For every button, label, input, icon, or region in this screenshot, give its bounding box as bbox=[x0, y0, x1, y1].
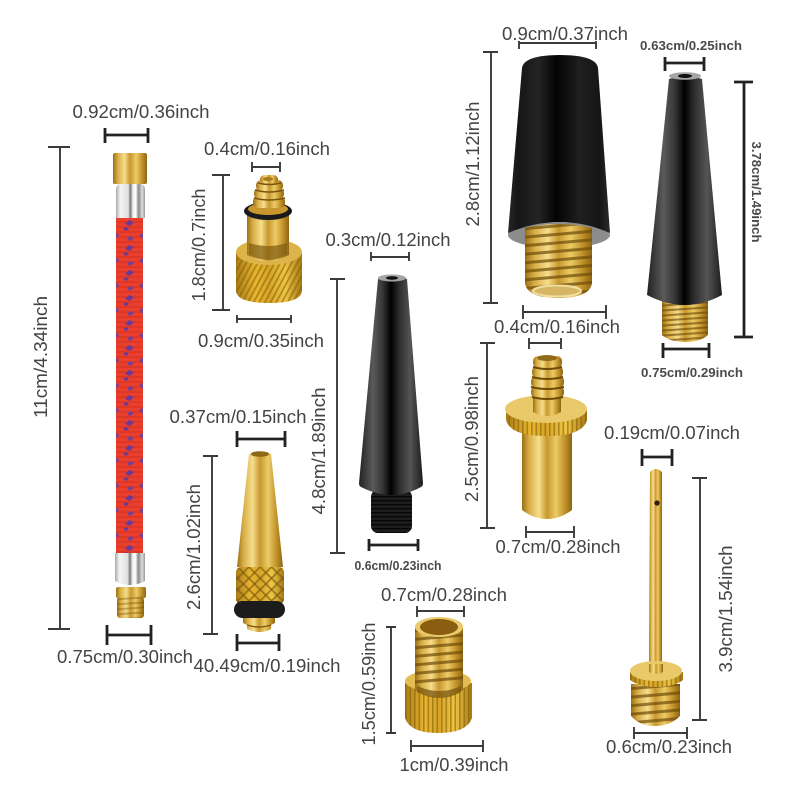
dimension: adapter height bbox=[189, 175, 230, 310]
dimension: slim cone thread width: 0.75cm/0.29inch bbox=[641, 365, 743, 380]
dimension: taper top width: 0.37cm/0.15inch bbox=[170, 407, 306, 427]
dimension: nut height: 1.5cm/0.59inch bbox=[359, 622, 379, 746]
wide cone body bbox=[508, 55, 610, 233]
dimension: wide cone height bbox=[463, 52, 498, 303]
dimension: taper bottom width bbox=[194, 634, 340, 676]
dimension: nut base width bbox=[400, 740, 508, 775]
dimension: wide cone thread width bbox=[494, 305, 620, 337]
dimension: adapter base width: 0.9cm/0.35inch bbox=[198, 331, 324, 351]
slim cone brass thread bbox=[662, 298, 708, 342]
valve flange bbox=[505, 395, 587, 436]
dimension: long cone top width: 0.3cm/0.12inch bbox=[326, 230, 450, 250]
dimension: needle width bbox=[604, 423, 740, 466]
dimension: nut top width bbox=[381, 585, 507, 617]
dimension: adapter height: 1.8cm/0.7inch bbox=[189, 188, 209, 302]
dimension: slim cone thread width bbox=[641, 343, 743, 380]
hose lower chrome ferrule bbox=[115, 553, 145, 585]
dimension: adapter base width bbox=[198, 315, 324, 351]
dimension: long cone height bbox=[309, 279, 345, 553]
brass taper lower tip bbox=[243, 612, 275, 632]
long cone body bbox=[359, 277, 423, 495]
brass taper knurled collar bbox=[236, 567, 284, 604]
valve cylinder bbox=[522, 432, 572, 519]
dimension: adapter tip width bbox=[204, 139, 330, 172]
component: knurled brass adapter bbox=[189, 139, 330, 351]
component: slim black cone bbox=[640, 38, 764, 380]
component: brass nut adapter bbox=[359, 585, 508, 775]
hose brass end thread bbox=[116, 587, 146, 618]
hose top brass cap bbox=[113, 153, 147, 184]
dimension: slim cone top width bbox=[640, 38, 742, 71]
dimension: taper top width bbox=[170, 407, 306, 447]
dimension: taper height bbox=[184, 456, 218, 634]
hose upper chrome ferrule bbox=[116, 184, 145, 218]
dimension: valve tip width bbox=[529, 338, 561, 349]
dimension: long cone top width bbox=[326, 230, 450, 261]
wide cone brass thread bbox=[525, 224, 592, 298]
dimension: taper height: 2.6cm/1.02inch bbox=[184, 484, 204, 610]
needle threaded base bbox=[630, 661, 683, 726]
needle shaft bbox=[649, 469, 662, 668]
dimension: hose end width bbox=[57, 625, 193, 667]
hose red braid bbox=[116, 218, 143, 553]
component: long black cone bbox=[309, 230, 450, 573]
brass taper o-ring bbox=[234, 601, 285, 618]
component: brass inflation needle bbox=[604, 423, 740, 757]
dimension: valve height bbox=[462, 343, 495, 528]
valve thread bbox=[531, 355, 564, 416]
adapter thread tip bbox=[253, 175, 285, 208]
component: brass tapered needle bbox=[170, 407, 340, 676]
dimension: needle height: 3.9cm/1.54inch bbox=[716, 546, 736, 672]
dimension: wide cone thread width: 0.4cm/0.16inch bbox=[494, 317, 620, 337]
dimension: valve base width: 0.7cm/0.28inch bbox=[496, 537, 620, 557]
dimension: nut height bbox=[359, 622, 396, 746]
nut threaded barrel bbox=[415, 617, 463, 698]
dimension: slim cone height: 3.78cm/1.49inch bbox=[749, 142, 764, 243]
dimension: nut top width: 0.7cm/0.28inch bbox=[381, 585, 507, 605]
dimension: taper bottom width: 40.49cm/0.19inch bbox=[194, 656, 340, 676]
dimension: needle height bbox=[692, 478, 736, 720]
dimension: needle base width: 0.6cm/0.23inch bbox=[606, 737, 732, 757]
dimension: hose length bbox=[31, 147, 70, 629]
dimension: needle width: 0.19cm/0.07inch bbox=[604, 423, 740, 443]
component: braided hose bbox=[31, 102, 210, 667]
dimension: slim cone top width: 0.63cm/0.25inch bbox=[640, 38, 742, 53]
adapter black o-ring bbox=[244, 202, 292, 220]
needle side hole bbox=[654, 500, 660, 506]
dimension: hose top width: 0.92cm/0.36inch bbox=[72, 102, 210, 122]
dimension: long cone thread width: 0.6cm/0.23inch bbox=[354, 558, 442, 573]
dimension: long cone height: 4.8cm/1.89inch bbox=[309, 388, 329, 514]
wide cone grey rim bbox=[508, 222, 610, 248]
dimension: hose length: 11cm/4.34inch bbox=[31, 296, 51, 418]
dimension: valve base width bbox=[496, 526, 620, 557]
dimension: adapter tip width: 0.4cm/0.16inch bbox=[204, 139, 330, 159]
long cone thread bbox=[371, 490, 412, 533]
dimension: wide cone top width: 0.9cm/0.37inch bbox=[502, 24, 628, 44]
dimension: wide cone height: 2.8cm/1.12inch bbox=[463, 102, 483, 226]
nut knurled base bbox=[405, 670, 472, 733]
dimension: needle base width bbox=[606, 727, 732, 757]
dimension: slim cone height bbox=[734, 82, 764, 337]
dimension: long cone thread width bbox=[354, 539, 442, 573]
adapter neck bbox=[247, 214, 289, 261]
dimension: nut base width: 1cm/0.39inch bbox=[400, 755, 508, 775]
component: wide black cone bbox=[463, 24, 628, 337]
dimension: valve height: 2.5cm/0.98inch bbox=[462, 376, 482, 502]
slim cone body bbox=[647, 76, 722, 305]
dimension: hose end width: 0.75cm/0.30inch bbox=[57, 647, 193, 667]
dimension: hose top width bbox=[72, 102, 210, 143]
brass taper body bbox=[237, 452, 283, 567]
component: flanged brass valve bbox=[462, 338, 620, 557]
adapter knurled base bbox=[236, 239, 302, 303]
